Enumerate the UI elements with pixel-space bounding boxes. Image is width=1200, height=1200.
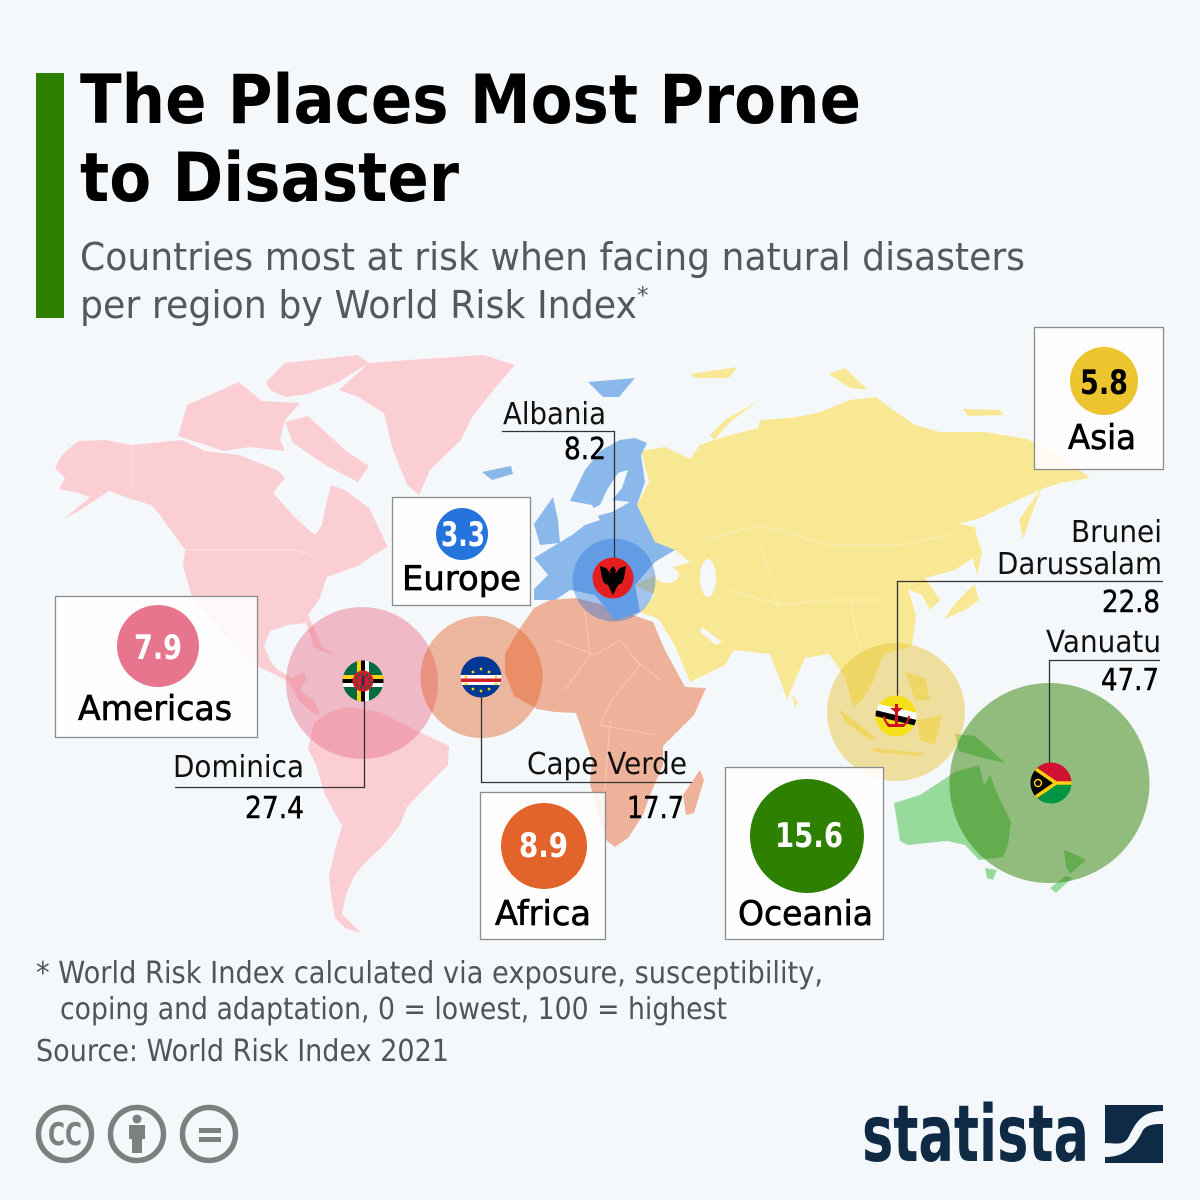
legend box: Americas: Americas bbox=[78, 689, 232, 729]
icon: no derivatives bbox=[182, 1108, 236, 1160]
legend box: Asia: 5.8 bbox=[1080, 363, 1128, 403]
subtitle: * bbox=[637, 283, 648, 309]
subtitle: per region by World Risk Index bbox=[80, 283, 637, 327]
bubble: Asia bbox=[827, 643, 965, 781]
callout: Cape Verde: 17.7 bbox=[627, 791, 684, 826]
bubble: Africa bbox=[420, 616, 542, 738]
legend box: Oceania: 15.6 bbox=[775, 816, 843, 856]
legend box: Oceania bbox=[726, 768, 884, 940]
flag: Brunei bbox=[875, 695, 917, 737]
map region: Oceania bbox=[894, 734, 1086, 893]
callout: Dominica: Dominica bbox=[173, 750, 304, 785]
country borders bbox=[555, 612, 660, 790]
accent bar bbox=[36, 73, 64, 318]
callout: Dominica bbox=[173, 700, 364, 826]
legend box: Europe: 3.3 bbox=[441, 515, 485, 555]
callout: Vanuatu bbox=[1046, 625, 1161, 765]
footnote bbox=[36, 956, 823, 1027]
legend box: Europe bbox=[392, 498, 530, 606]
footnote: coping and adaptation, 0 = lowest, 100 = highest bbox=[60, 992, 727, 1027]
subtitle: Countries most at risk when facing natural disasters bbox=[80, 235, 1025, 279]
bubble: Europe bbox=[572, 538, 656, 622]
title: The Places Most Prone bbox=[80, 61, 861, 140]
flag: Vanuatu bbox=[1030, 762, 1072, 804]
legend box: Africa: Africa bbox=[495, 894, 591, 934]
callout: Cape Verde: Cape Verde bbox=[527, 747, 687, 782]
map region: Asia bbox=[635, 367, 1090, 756]
legend box: Oceania: Oceania bbox=[738, 894, 873, 934]
callout: Vanuatu: 47.7 bbox=[1101, 663, 1159, 698]
country borders: Asia bbox=[705, 525, 950, 650]
title: to Disaster bbox=[80, 139, 459, 218]
icon: attribution bbox=[110, 1108, 164, 1160]
flag: Dominica bbox=[342, 660, 384, 702]
logo: statista: statista bbox=[862, 1090, 1089, 1180]
callout: Albania: Albania bbox=[503, 397, 606, 432]
callout: Cape Verde bbox=[482, 697, 692, 826]
subtitle bbox=[80, 235, 1025, 327]
source: Source: World Risk Index 2021 bbox=[36, 1034, 449, 1069]
callout: Brunei Darussalam: Darussalam bbox=[997, 547, 1162, 582]
callout: Albania: 8.2 bbox=[564, 432, 606, 467]
legend box: Africa bbox=[480, 792, 606, 940]
title bbox=[80, 61, 861, 218]
callout: Vanuatu: Vanuatu bbox=[1046, 625, 1161, 660]
callout: Brunei Darussalam bbox=[898, 515, 1163, 700]
world map bbox=[55, 355, 1090, 933]
footnote: * World Risk Index calculated via exposure, susceptibility, bbox=[36, 956, 823, 991]
bubble: Oceania bbox=[950, 683, 1150, 883]
map region: Americas bbox=[55, 355, 515, 933]
map region: Europe bbox=[482, 378, 675, 620]
flag: Cape Verde bbox=[460, 656, 502, 698]
icon: creative commons: CC bbox=[48, 1117, 82, 1153]
legend box: Americas: 7.9 bbox=[134, 628, 182, 668]
legend box: Asia: Asia bbox=[1068, 418, 1136, 458]
callout: Dominica: 27.4 bbox=[245, 791, 304, 826]
map region: Africa bbox=[505, 598, 706, 847]
callout: Brunei Darussalam: Brunei bbox=[1071, 515, 1162, 550]
icon: creative commons bbox=[38, 1108, 92, 1160]
bubble: Americas bbox=[286, 607, 438, 759]
flag: Albania bbox=[592, 557, 634, 599]
legend box: Asia bbox=[1034, 328, 1164, 470]
Americas borders bbox=[132, 445, 312, 650]
callout: Brunei Darussalam: 22.8 bbox=[1102, 585, 1160, 620]
callout: Albania bbox=[502, 397, 614, 560]
legend box: Europe: Europe bbox=[402, 559, 521, 599]
legend box: Africa: 8.9 bbox=[519, 826, 568, 866]
legend box: Americas bbox=[56, 596, 258, 738]
